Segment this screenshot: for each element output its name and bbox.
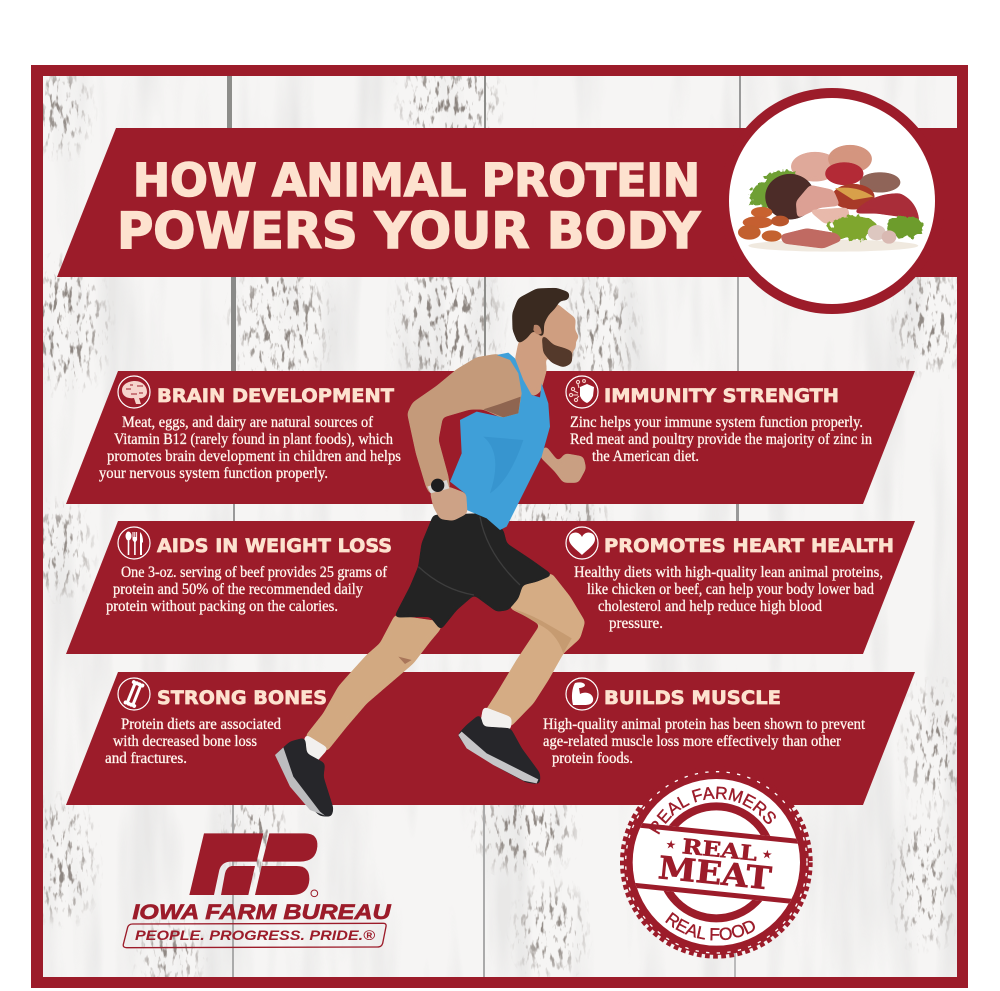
text: brain development body	[99, 414, 401, 482]
text: heart health body: pressure.	[609, 615, 663, 632]
text: brain development body: Vitamin B12 (rarely found in plant foods), which	[114, 431, 393, 448]
text: brain development body: promotes brain development in children and helps	[107, 448, 401, 465]
panel: weight loss and heart band	[66, 521, 915, 654]
text: weight loss body: protein without packing on the calories.	[106, 598, 338, 615]
panel: brain and immunity band	[66, 371, 915, 504]
title text: HOW ANIMAL PROTEIN	[133, 154, 700, 207]
text: strong bones body: and fractures.	[105, 750, 187, 767]
text: heart health body: like chicken or beef, can help your body lower bad	[587, 581, 874, 598]
heading: strong bones: STRONG BONES	[157, 687, 327, 709]
meat platter illustration	[738, 145, 924, 252]
stamp center band: ★	[761, 847, 773, 862]
icon: bones	[118, 678, 150, 710]
logo tagline box	[123, 923, 386, 948]
icon: cutlery	[118, 527, 150, 559]
stamp center band	[632, 823, 800, 904]
logo mark	[189, 833, 318, 897]
heading: brain development: BRAIN DEVELOPMENT	[157, 385, 394, 407]
stamp curved text: REAL FOOD	[665, 912, 755, 940]
text: builds muscle body: protein foods.	[552, 750, 633, 767]
heading: promotes heart health: PROMOTES HEART HEALTH	[604, 535, 894, 557]
text: weight loss body: One 3-oz. serving of beef provides 25 grams of	[121, 564, 388, 581]
runner illustration	[275, 288, 586, 817]
text: heart health body: cholesterol and help reduce high blood	[598, 598, 822, 615]
stamp center band: REAL	[681, 834, 759, 866]
text: strong bones body	[105, 716, 281, 767]
text: strong bones body: Protein diets are associated	[121, 716, 281, 733]
title text	[117, 154, 701, 260]
text: strong bones body: with decreased bone loss	[113, 733, 257, 750]
text: brain development body: Meat, eggs, and dairy are natural sources of	[122, 414, 374, 431]
logo tagline box: PEOPLE. PROGRESS. PRIDE.®	[135, 927, 376, 943]
title banner	[57, 128, 957, 277]
text: heart health body	[574, 564, 883, 632]
text: heart health body: Healthy diets with high-quality lean animal proteins,	[574, 564, 883, 581]
icon: heart	[566, 527, 598, 559]
Iowa Farm Bureau logo	[123, 833, 391, 948]
text: weight loss body: protein and 50% of the recommended daily	[113, 581, 363, 598]
text: builds muscle body: age-related muscle loss more effectively than other	[543, 733, 842, 750]
stamp center band: MEAT	[657, 850, 773, 898]
text: immunity strength body: Red meat and poultry provide the majority of zinc in	[570, 431, 872, 448]
stamp inner ring	[660, 806, 772, 918]
icon: shield and virus	[566, 376, 598, 408]
logo wordmark: IOWA FARM BUREAU	[132, 900, 391, 924]
icon: brain	[118, 376, 150, 408]
stamp curved text: REAL FARMERS	[649, 786, 776, 834]
heading: immunity strength: IMMUNITY STRENGTH	[604, 385, 839, 407]
heading: builds muscle: BUILDS MUSCLE	[604, 687, 781, 709]
stamp center band: ★	[665, 837, 677, 852]
stamp curved text	[649, 786, 776, 940]
title text: POWERS YOUR BODY	[117, 202, 701, 260]
icon: flexed muscle	[566, 678, 598, 710]
panel: bones and muscle band	[66, 672, 915, 805]
meat photo circle	[719, 88, 945, 314]
text: immunity strength body	[570, 414, 872, 465]
heading: aids in weight loss: AIDS IN WEIGHT LOSS	[157, 535, 392, 557]
runner lower body	[275, 513, 585, 817]
text: immunity strength body: Zinc helps your immune system function properly.	[570, 414, 863, 431]
text: weight loss body	[106, 564, 388, 615]
runner upper body	[407, 288, 586, 530]
text: immunity strength body: the American diet.	[592, 448, 699, 465]
text: builds muscle body: High-quality animal protein has been shown to prevent	[543, 716, 866, 733]
text: brain development body: your nervous system function properly.	[99, 465, 328, 482]
real meat stamp	[620, 771, 813, 959]
text: builds muscle body	[543, 716, 866, 767]
